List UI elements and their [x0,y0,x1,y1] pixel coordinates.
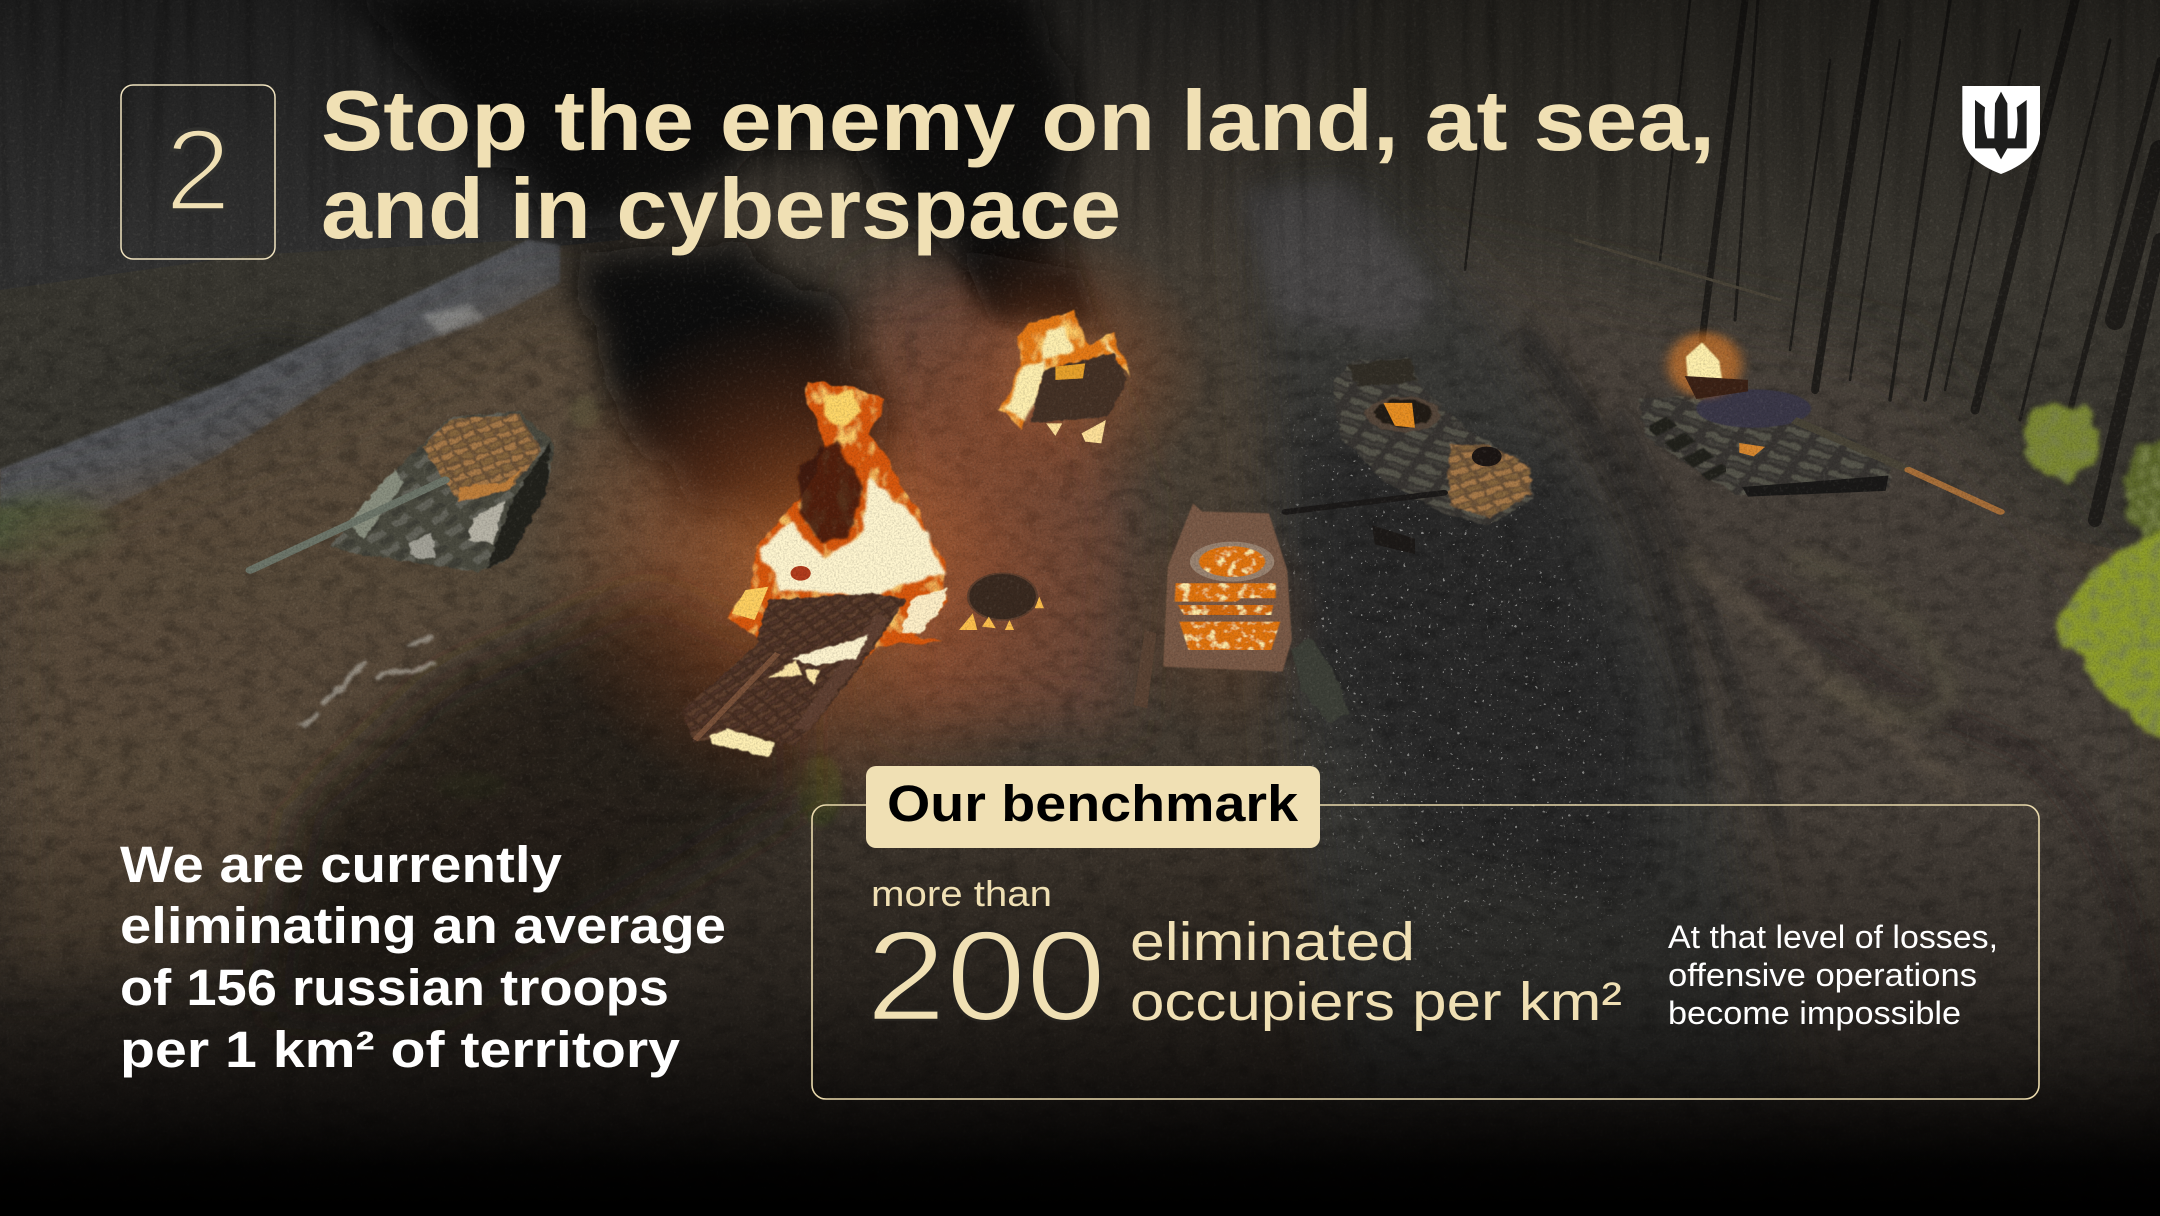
fire glow [530,300,1130,820]
trees on the right [1465,0,2160,520]
title [321,74,1715,257]
light brown slope [0,290,700,980]
benchmark note: At that level of losses, [1668,919,1998,955]
top right field and right side ground [1260,0,2160,560]
black smoke columns [330,0,1100,550]
left statement text: eliminating an average [120,897,726,954]
benchmark tab [866,766,1320,848]
white ash streaks [296,634,438,728]
wrecked hull [681,593,906,747]
flame core [760,477,943,597]
river [0,240,560,510]
more than label: more than [871,873,1052,914]
second burning vehicle [998,312,1131,443]
forest at the top left [0,0,620,300]
panel: our benchmark [812,766,2039,1099]
benchmark tab: Our benchmark [887,775,1299,832]
left statement text [120,836,726,1078]
green bushes on the right [2024,402,2160,745]
benchmark unit text: eliminated [1130,912,1415,972]
benchmark unit text [1130,912,1622,1032]
dark smoke through flame [798,440,860,543]
flame outer [730,382,948,680]
big number 200: 200 [866,905,1106,1048]
benchmark note [1668,919,1998,1031]
left statement text: of 156 russian troops [120,959,669,1016]
benchmark note: become impossible [1668,995,1961,1031]
left tank [250,411,555,572]
wrecked tank on the road [1286,357,1533,554]
burnt ground [260,590,800,1020]
right burning tank [1639,332,2000,512]
left statement text: We are currently [120,836,563,893]
number badge [121,85,275,259]
road [1250,180,1790,1100]
ground texture layers [0,270,2160,1021]
number badge: 2 [165,105,231,235]
top and bottom dark fades [0,0,2160,260]
title: and in cyberspace [321,162,1121,257]
icon: shield with trident emblem [1962,86,2040,174]
title: Stop the enemy on land, at sea, [321,74,1715,169]
blown-off wheel [1292,637,1349,723]
left statement text: per 1 km² of territory [120,1021,681,1078]
dark slope above the river [0,240,528,469]
grassy green patches [0,396,842,826]
burning infantry vehicle [1133,503,1349,723]
main burning tank and fire [681,382,1044,757]
detached turret [968,573,1037,620]
wheel tracks [1530,340,2150,1000]
benchmark unit text: occupiers per km² [1130,972,1622,1032]
benchmark note: offensive operations [1668,957,1977,993]
lit ground between the fires [860,250,1130,720]
